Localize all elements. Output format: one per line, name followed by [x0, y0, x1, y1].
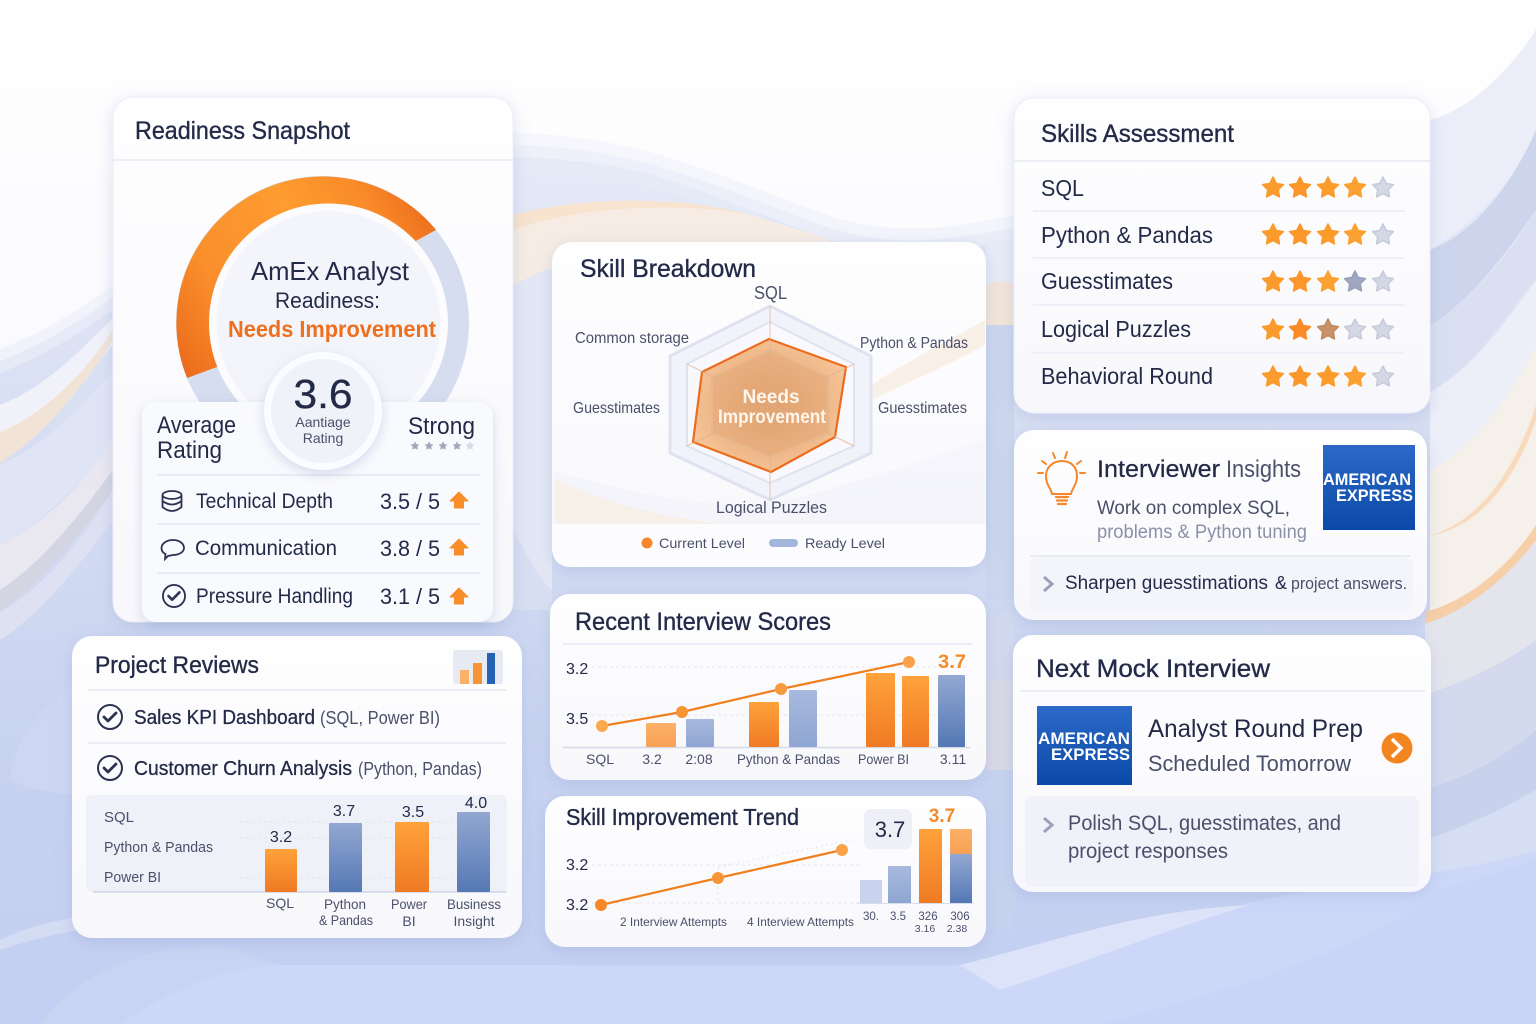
- bar chart: project scores: SQL: [266, 895, 294, 911]
- combo chart: scores: Python & Pandas: [737, 751, 840, 767]
- score badge: Aantiage: [295, 414, 351, 430]
- radar axis labels: Python & Pandas: [860, 335, 968, 352]
- average rating label: Rating: [157, 437, 222, 464]
- panel: skill improvement trend: [545, 796, 986, 947]
- panel: interviewer insights: [1014, 430, 1427, 620]
- insights text: Insights: [1226, 456, 1301, 483]
- legend: [642, 535, 885, 551]
- heading: skill improvement trend: Skill Improvement Trend: [566, 804, 799, 830]
- radar axis labels: [573, 283, 968, 517]
- bar chart: project scores: Python & Pandas: [104, 839, 213, 856]
- row: sql: SQL: [1041, 175, 1084, 201]
- row: guesstimates: [1041, 268, 1393, 294]
- radar axis labels: Logical Puzzles: [716, 498, 827, 517]
- logo: american express: AMERICAN: [1323, 471, 1411, 489]
- row: sales kpi dashboard: [98, 705, 440, 729]
- action item: [1044, 573, 1407, 594]
- bar chart: trend: [858, 806, 973, 935]
- bar chart: project scores: Python: [324, 896, 366, 912]
- bar chart: project scores: BI: [402, 913, 416, 929]
- row: customer churn analysis: [98, 756, 482, 780]
- radar axis labels: SQL: [754, 283, 787, 303]
- combo chart: scores: 3.11: [940, 751, 966, 767]
- insights text: Work on complex SQL,: [1097, 498, 1290, 519]
- bar chart: trend: 3.16: [915, 923, 935, 935]
- bar chart: project scores: 4.0: [465, 795, 487, 812]
- bar chart: project scores: Insight: [454, 913, 495, 929]
- bar chart: trend: 326: [918, 911, 938, 923]
- logo: american express: EXPRESS: [1051, 745, 1130, 764]
- line chart: trend: 2 Interview Attempts: [620, 915, 727, 929]
- heading: readiness snapshot: Readiness Snapshot: [135, 117, 350, 145]
- radar axis labels: Guesstimates: [878, 400, 967, 417]
- insights text: Interviewer: [1097, 456, 1220, 483]
- bar chart: project scores: 3.5: [402, 804, 424, 821]
- icon: light bulb: [1038, 452, 1085, 504]
- combo chart: scores: [563, 652, 970, 767]
- row: pressure handling: [163, 584, 468, 609]
- heading: next mock interview: Next Mock Interview: [1036, 655, 1271, 683]
- value badge: [864, 809, 912, 849]
- row: pressure handling: 3.1 / 5: [380, 584, 440, 609]
- bar chart: project scores: Business: [447, 896, 501, 912]
- row: behavioral round: [1041, 363, 1393, 389]
- bar chart: project scores: SQL: [104, 809, 134, 826]
- row: customer churn analysis: Customer Churn Analysis: [134, 758, 352, 780]
- bar chart: project scores: & Pandas: [319, 912, 373, 928]
- combo chart: scores: 3.2: [642, 751, 662, 767]
- value badge: 3.7: [875, 817, 905, 842]
- interview details: Analyst Round Prep: [1148, 715, 1363, 743]
- row: logical puzzles: [1041, 316, 1393, 342]
- insights text: [1097, 456, 1307, 543]
- bar chart: project scores: 3.2: [270, 829, 292, 846]
- line chart: trend: 4 Interview Attempts: [747, 915, 854, 929]
- combo chart: scores: 3.5: [566, 711, 588, 728]
- heading: skills assessment: Skills Assessment: [1041, 120, 1234, 148]
- panel: recent interview scores: [550, 594, 986, 780]
- bar chart: project scores: 3.7: [333, 803, 355, 820]
- score badge: 3.6: [294, 371, 352, 417]
- row: sales kpi dashboard: (SQL, Power BI): [320, 708, 440, 728]
- sub-panel: ratings: [142, 402, 493, 622]
- icon: bar chart: [453, 650, 503, 684]
- row: guesstimates: Guesstimates: [1041, 268, 1173, 294]
- bar chart: trend: 3.5: [890, 911, 906, 923]
- row: sql: [1041, 175, 1393, 201]
- bar chart: trend: 306: [950, 911, 970, 923]
- heading: project reviews: Project Reviews: [95, 652, 259, 679]
- line chart: trend: 3.2: [566, 897, 588, 914]
- logo: american express: [1323, 445, 1415, 530]
- bar chart: project scores: Power: [391, 896, 427, 912]
- logo: american express: EXPRESS: [1336, 487, 1413, 505]
- insights text: problems & Python tuning: [1097, 522, 1307, 543]
- row: sales kpi dashboard: Sales KPI Dashboard: [134, 707, 315, 729]
- combo chart: scores: 3.7: [938, 652, 966, 673]
- interview details: Scheduled Tomorrow: [1148, 751, 1351, 776]
- logo: american express: [1037, 706, 1132, 785]
- line chart: trend: [566, 840, 860, 929]
- interview details: [1148, 715, 1363, 776]
- bar chart: trend: 2.38: [947, 923, 967, 935]
- gauge: [176, 176, 469, 469]
- heading: recent interview scores: Recent Interview Scores: [575, 608, 831, 636]
- row: communication: 3.8 / 5: [380, 536, 440, 561]
- bar chart: trend: 30.: [863, 911, 879, 923]
- score badge: [264, 352, 382, 470]
- panel: skill breakdown: [552, 242, 986, 567]
- score badge: Rating: [303, 430, 343, 446]
- legend: Ready Level: [805, 535, 885, 551]
- row: communication: Communication: [195, 537, 337, 560]
- radar axis labels: Guesstimates: [573, 400, 660, 417]
- action item: Sharpen guesstimations: [1065, 573, 1268, 594]
- radar centre label: [718, 387, 827, 428]
- row: customer churn analysis: (Python, Pandas): [358, 759, 482, 779]
- combo chart: scores: Power BI: [858, 751, 909, 767]
- panel: project reviews: [72, 636, 522, 938]
- icon: arrow button: [1382, 732, 1412, 764]
- combo chart: scores: 2:08: [685, 751, 713, 767]
- legend: Current Level: [659, 535, 745, 551]
- row: behavioral round: Behavioral Round: [1041, 363, 1213, 389]
- action item: project answers.: [1291, 574, 1407, 593]
- action item: project responses: [1068, 840, 1228, 863]
- panel: skills assessment: [1014, 98, 1430, 413]
- panel: next mock interview: [1013, 635, 1431, 892]
- panel: readiness snapshot: [113, 97, 513, 622]
- combo chart: scores: 3.2: [566, 661, 588, 678]
- row: python and pandas: Python & Pandas: [1041, 222, 1213, 248]
- gauge label: Needs Improvement: [228, 316, 436, 342]
- bar chart: project scores: [86, 795, 507, 929]
- strong rating label: Strong: [408, 413, 475, 440]
- action item: Polish SQL, guesstimates, and: [1068, 812, 1341, 835]
- row: pressure handling: Pressure Handling: [196, 585, 353, 608]
- gauge label: [228, 256, 436, 342]
- action item: &: [1275, 573, 1287, 593]
- bar chart: trend: 3.7: [929, 806, 955, 827]
- radar centre label: Improvement: [718, 407, 827, 428]
- radar centre label: Needs: [742, 387, 800, 408]
- radar axis labels: Common storage: [575, 330, 689, 347]
- row: communication: [162, 536, 468, 561]
- line chart: trend: 3.2: [566, 857, 588, 874]
- row: technical depth: Technical Depth: [196, 490, 333, 513]
- row: technical depth: [162, 489, 468, 514]
- radar chart: [573, 283, 968, 517]
- combo chart: scores: SQL: [586, 751, 614, 767]
- heading: skill breakdown: Skill Breakdown: [580, 255, 756, 283]
- action item: [1025, 796, 1419, 887]
- gauge label: AmEx Analyst: [251, 256, 410, 286]
- row: python and pandas: [1041, 222, 1393, 248]
- row: logical puzzles: Logical Puzzles: [1041, 316, 1191, 342]
- bar chart: project scores: Power BI: [104, 869, 161, 886]
- row: technical depth: 3.5 / 5: [380, 489, 440, 514]
- average rating label: Average: [157, 412, 236, 439]
- gauge label: Readiness:: [275, 288, 380, 313]
- logo: american express: AMERICAN: [1038, 729, 1130, 748]
